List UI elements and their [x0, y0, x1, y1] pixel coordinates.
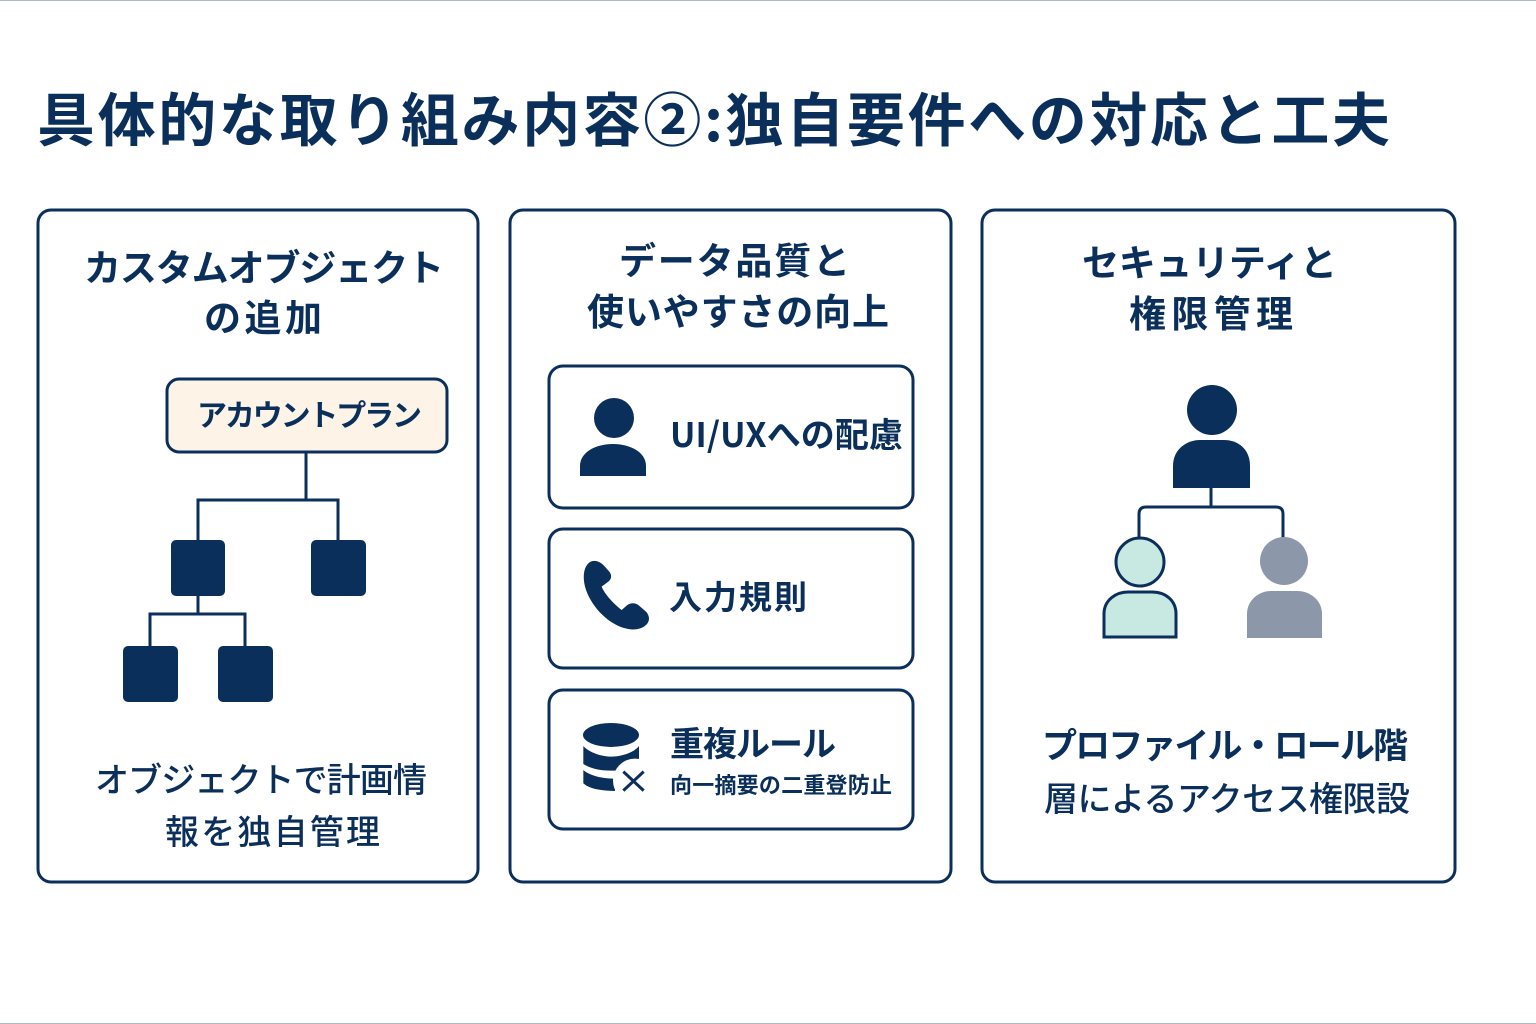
panel: data quality and usability	[510, 210, 951, 882]
account plan box: アカウントプラン	[197, 391, 422, 435]
heading line 2: custom objects: の追加	[204, 288, 322, 342]
card: UI/UX	[549, 366, 913, 508]
label: input rules: 入力規則	[669, 571, 807, 619]
heading: custom objects: カスタムオブジェクト	[84, 238, 444, 292]
heading line 2: permissions: 権限管理	[1129, 284, 1293, 338]
heading: security: セキュリティと	[1082, 233, 1337, 287]
heading: data quality: データ品質と	[619, 231, 850, 285]
description: custom objects: 報を独自管理	[165, 805, 380, 854]
sublabel: duplicate prevention: 向一摘要の二重登防止	[670, 768, 892, 800]
panel: custom objects	[38, 210, 478, 882]
account plan box	[167, 379, 447, 452]
icon: phone	[584, 561, 649, 629]
description: custom objects: オブジェクトで計画情	[95, 753, 427, 802]
panel: security and permissions	[982, 210, 1455, 882]
card: input rules	[549, 529, 913, 668]
description: custom objects	[95, 753, 427, 854]
label: duplicate rules: 重複ルール	[670, 717, 836, 766]
card: duplicate rules	[549, 690, 913, 829]
icon: database with cross	[583, 723, 657, 803]
description: access control: プロファイル・ロール階	[1042, 718, 1408, 769]
description: access control	[1042, 718, 1410, 821]
tree diagram	[123, 452, 366, 702]
heading line 2: usability: 使いやすさの向上	[587, 282, 889, 336]
icon: person	[580, 398, 646, 476]
label: UI/UX: UI/UXへの配慮	[670, 408, 903, 457]
icon: role hierarchy	[1104, 385, 1322, 638]
description: access control: 層によるアクセス権限設	[1044, 772, 1410, 821]
title: 具体的な取り組み内容②:独自要件への対応と工夫	[37, 74, 1390, 158]
